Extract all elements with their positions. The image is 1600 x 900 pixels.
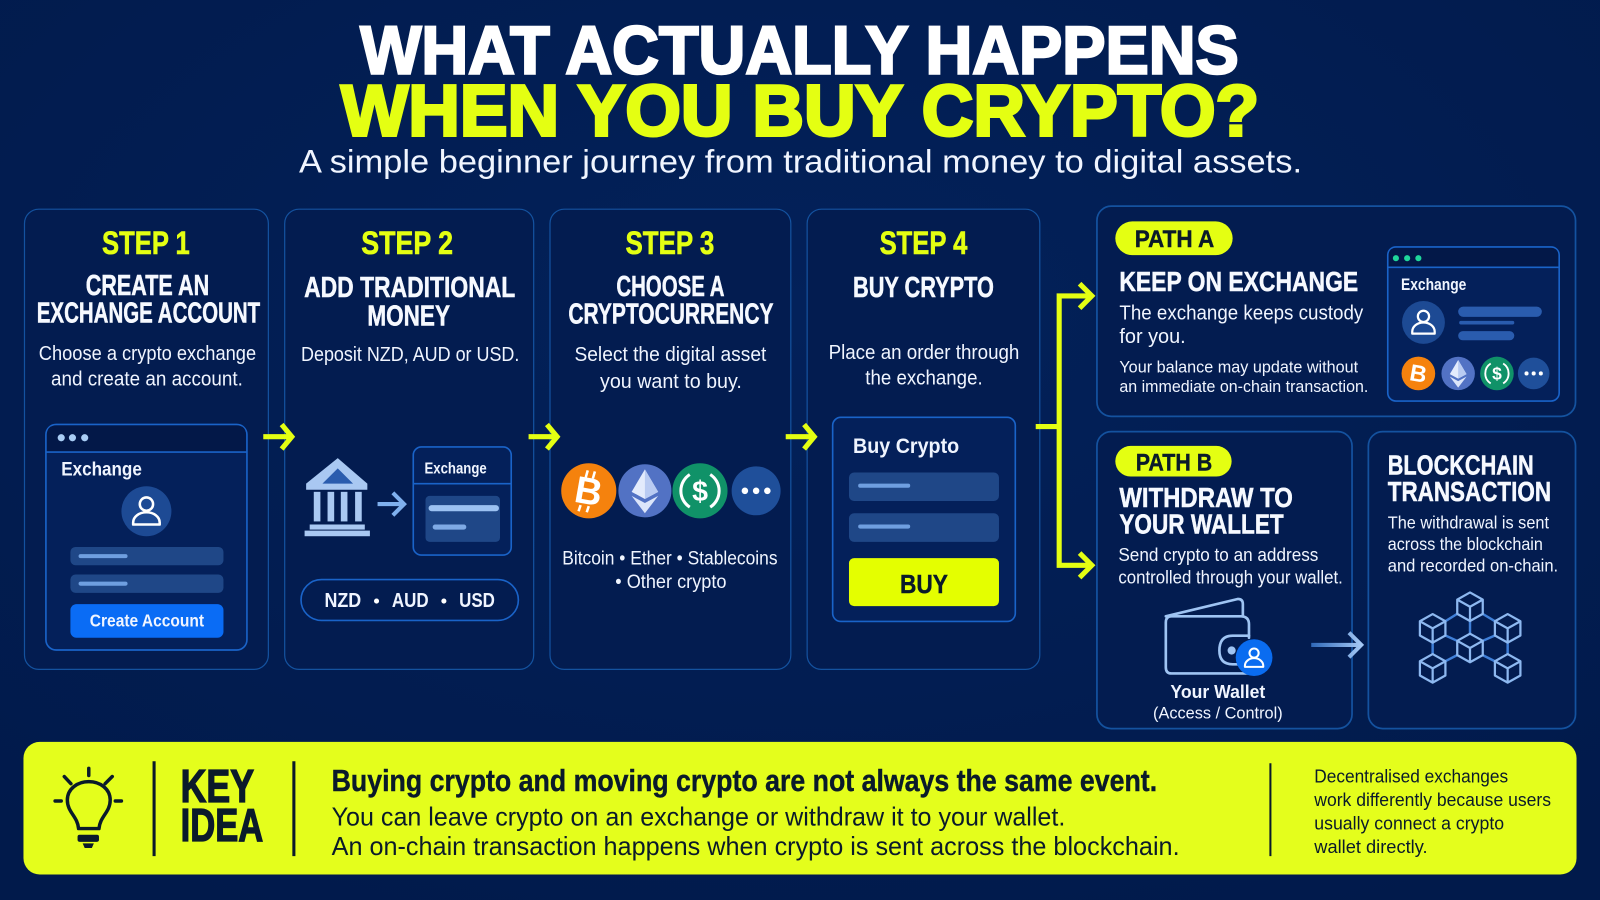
buy button — [849, 558, 999, 606]
create account button: Create Account — [90, 611, 204, 631]
title: WHEN YOU BUY CRYPTO? — [341, 71, 1259, 152]
blockchain heading: TRANSACTION — [1388, 476, 1551, 507]
coin captions — [562, 547, 778, 593]
key idea body: An on-chain transaction happens when crypto is sent across the blockchain. — [332, 833, 1180, 861]
step 1 heading — [37, 270, 261, 329]
blockchain heading — [1388, 449, 1551, 507]
arrow: step 3 to step 4 — [786, 424, 814, 449]
path B badge — [1115, 446, 1232, 477]
icon: bitcoin coin — [561, 463, 616, 518]
step 1 label: STEP 1 — [102, 224, 190, 261]
exchange wallet window — [1388, 247, 1559, 401]
coin captions: • Other crypto — [615, 571, 727, 593]
icon: user avatar — [1402, 301, 1445, 344]
key idea body: You can leave crypto on an exchange or withdraw it to your wallet. — [332, 804, 1065, 832]
step 4 label: STEP 4 — [880, 224, 967, 261]
blockchain description: and recorded on-chain. — [1388, 555, 1558, 575]
panel: blockchain transaction — [1368, 432, 1576, 729]
panel: step 1 — [24, 209, 268, 669]
arrow: bank to exchange — [378, 493, 404, 515]
icon: stablecoin: $ — [692, 476, 708, 508]
decentralised exchanges note: work differently because users — [1313, 789, 1551, 810]
step 1 description: and create an account. — [51, 369, 243, 391]
buy crypto order card: Buy Crypto — [853, 434, 959, 458]
step 3 description — [574, 344, 767, 393]
currency pill: AUD — [392, 590, 429, 612]
icon: bitcoin coin: B — [572, 468, 606, 514]
blockchain description: The withdrawal is sent — [1388, 513, 1549, 533]
path B description: Send crypto to an address — [1118, 544, 1318, 565]
blockchain description — [1388, 513, 1558, 575]
panel: step 4 — [807, 209, 1040, 669]
step 2 label: STEP 2 — [361, 224, 453, 261]
step 2 heading: MONEY — [367, 301, 450, 333]
step 2 heading — [304, 272, 515, 333]
step 3 heading: CHOOSE A — [616, 271, 724, 303]
icon: stablecoin — [672, 463, 728, 518]
decentralised exchanges note: wallet directly. — [1313, 836, 1428, 857]
path B description — [1118, 544, 1343, 588]
buy crypto order card — [833, 417, 1015, 621]
step 4 description: Place an order through — [829, 342, 1019, 364]
path A badge: PATH A — [1135, 226, 1215, 253]
icon: other crypto — [732, 466, 781, 515]
exchange account window mockup — [46, 424, 247, 650]
icon: small ether — [1441, 357, 1475, 390]
subtitle: A simple beginner journey from traditional money to digital assets. — [299, 142, 1302, 179]
decentralised exchanges note: Decentralised exchanges — [1314, 766, 1508, 787]
step 2 heading: ADD TRADITIONAL — [304, 272, 515, 304]
step 3 description: you want to buy. — [600, 371, 742, 393]
decentralised exchanges note: usually connect a crypto — [1314, 813, 1504, 834]
wallet caption: (Access / Control) — [1153, 703, 1283, 722]
currency pill — [301, 580, 518, 620]
step 3 description: Select the digital asset — [574, 344, 767, 366]
step 3 heading: CRYPTOCURRENCY — [568, 298, 773, 330]
mini exchange window — [413, 447, 511, 555]
title — [341, 13, 1259, 152]
icon: small other crypto — [1518, 358, 1549, 389]
key idea label: IDEA — [181, 799, 263, 851]
step 1 description — [39, 343, 256, 391]
step 1 description: Choose a crypto exchange — [39, 343, 256, 365]
icon: bank — [305, 458, 370, 536]
path A description: for you. — [1119, 326, 1186, 348]
step 1 heading: CREATE AN — [86, 270, 209, 302]
path A note: Your balance may update without — [1119, 357, 1358, 376]
path B badge: PATH B — [1136, 449, 1212, 476]
icon: wallet — [1166, 599, 1272, 676]
path B heading: WITHDRAW TO — [1119, 482, 1293, 513]
currency pill: USD — [459, 590, 495, 612]
panel: key idea banner — [23, 742, 1577, 874]
step 4 heading: BUY CRYPTO — [853, 272, 994, 304]
step 2 description: Deposit NZD, AUD or USD. — [301, 344, 519, 366]
mini exchange window: Exchange — [424, 460, 487, 477]
path A description — [1119, 302, 1364, 348]
icon: small bitcoin — [1402, 357, 1435, 390]
blockchain description: across the blockchain — [1388, 534, 1543, 554]
step 4 description — [829, 342, 1019, 390]
create account button — [70, 604, 223, 638]
panel: step 2 — [285, 209, 534, 669]
title: WHAT ACTUALLY HAPPENS — [360, 13, 1239, 88]
key idea headline: Buying crypto and moving crypto are not always the same event. — [332, 764, 1157, 798]
wallet caption — [1153, 681, 1283, 722]
icon: small stablecoin: $ — [1492, 364, 1502, 384]
path B heading — [1119, 482, 1293, 540]
key idea label: KEY — [181, 760, 254, 812]
icon: small bitcoin: B — [1408, 359, 1429, 388]
buy button: BUY — [900, 571, 948, 599]
arrow: wallet to blockchain — [1311, 633, 1361, 657]
coin captions: Bitcoin • Ether • Stablecoins — [562, 547, 778, 569]
step 1 heading: EXCHANGE ACCOUNT — [37, 297, 261, 329]
icon: small stablecoin — [1480, 357, 1514, 390]
path A note: an immediate on-chain transaction. — [1119, 377, 1368, 396]
path A badge — [1115, 221, 1233, 255]
path A heading: KEEP ON EXCHANGE — [1119, 266, 1358, 297]
step 3 label: STEP 3 — [626, 224, 714, 261]
exchange account window mockup: Exchange — [61, 459, 142, 481]
panel: step 3 — [550, 209, 791, 669]
path A note — [1119, 357, 1368, 396]
key idea label — [181, 760, 263, 851]
blockchain heading: BLOCKCHAIN — [1388, 449, 1534, 480]
icon: user avatar — [121, 486, 171, 536]
icon: blockchain cubes — [1420, 592, 1520, 683]
wallet caption: Your Wallet — [1170, 681, 1266, 702]
key idea body — [332, 804, 1180, 861]
path A description: The exchange keeps custody — [1119, 302, 1364, 324]
panel: path B — [1097, 432, 1352, 729]
step 4 description: the exchange. — [865, 368, 983, 390]
arrow: step 2 to step 3 — [529, 424, 557, 449]
arrow: branch from step 4 to paths — [1036, 284, 1092, 578]
arrow: step 1 to step 2 — [263, 424, 292, 449]
icon: wallet user badge — [1236, 639, 1272, 676]
path B heading: YOUR WALLET — [1119, 509, 1284, 540]
path B description: controlled through your wallet. — [1118, 567, 1343, 588]
step 3 heading — [568, 271, 773, 330]
icon: ether coin — [618, 464, 671, 517]
decentralised exchanges note — [1313, 766, 1551, 857]
currency pill: NZD — [324, 590, 361, 612]
icon: lightbulb — [55, 768, 121, 848]
exchange wallet window: Exchange — [1401, 276, 1466, 294]
panel: path A — [1097, 206, 1576, 416]
